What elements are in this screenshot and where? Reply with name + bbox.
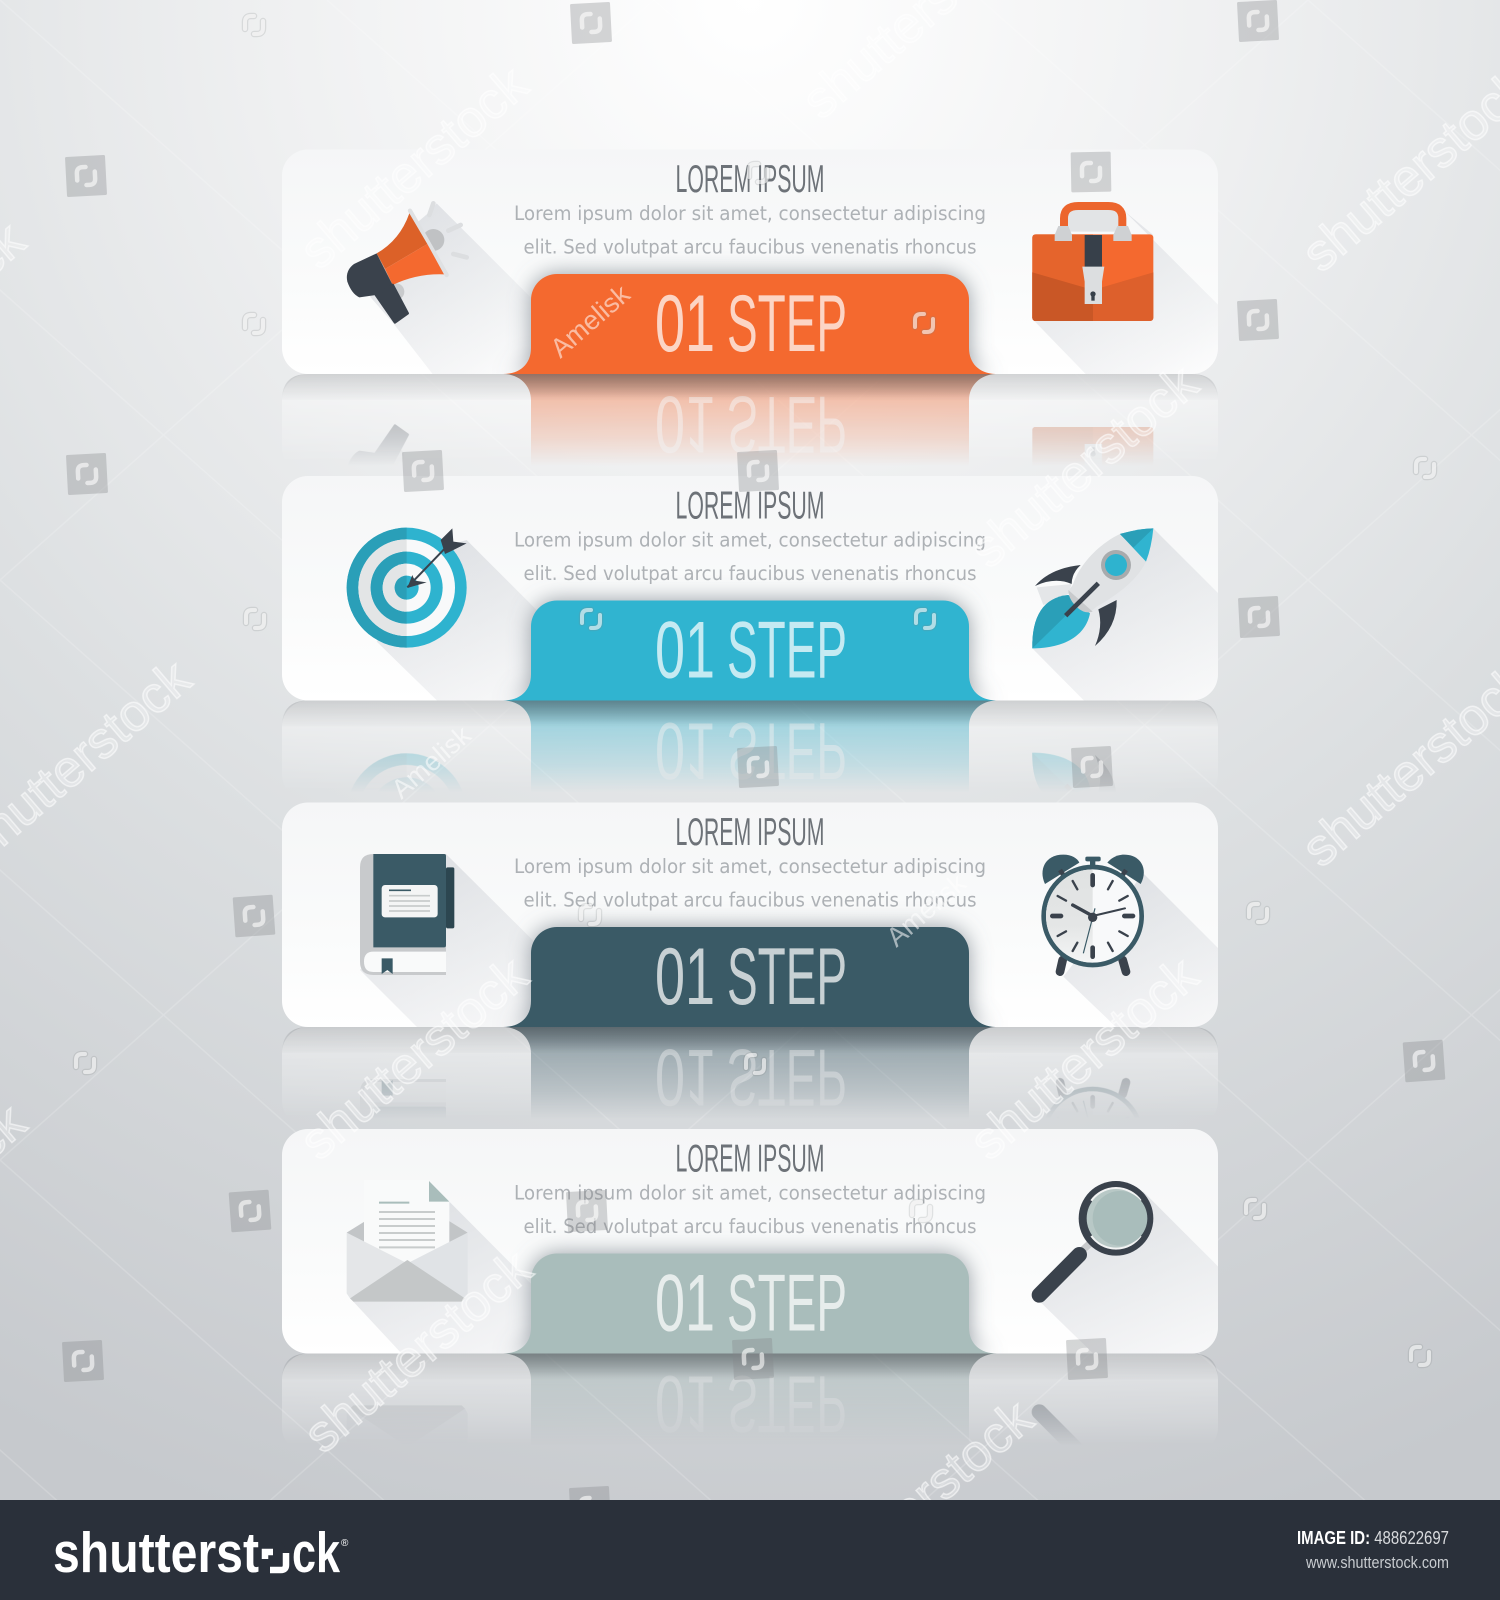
step label row 1: STEP	[727, 279, 847, 369]
seam shadow row 1	[282, 374, 1218, 400]
tab row 1	[503, 274, 997, 374]
watermark: diagonal wordmarks: shutterstock	[958, 945, 1208, 1170]
body text row 2: elit. Sed volutpat arcu faucibus venenatis rhoncus	[524, 562, 976, 585]
step label row 4: STEP	[727, 1258, 847, 1348]
icon: magnifying glass	[1032, 1181, 1218, 1354]
body text row 3	[514, 855, 986, 912]
body text row 3: elit. Sed volutpat arcu faucibus venenatis rhoncus	[524, 888, 976, 912]
watermark: Amelisk credits: Amelisk	[545, 279, 636, 364]
watermark: diagonal wordmarks: shutterstock	[288, 945, 538, 1170]
tab row 4	[503, 1254, 997, 1354]
reflection of row 4: STEP	[727, 1358, 847, 1448]
body text row 4: elit. Sed volutpat arcu faucibus venenatis rhoncus	[524, 1215, 976, 1238]
icon: briefcase	[1032, 202, 1218, 374]
icon: rocket	[1032, 528, 1218, 700]
tab shadow row 4	[503, 1254, 997, 1354]
icon: book	[360, 854, 532, 1027]
reflection of row 1: STEP	[727, 379, 847, 469]
body text row 4: Lorem ipsum dolor sit amet, consectetur adipiscing	[514, 1182, 986, 1204]
watermark: Amelisk credits: Amelisk	[386, 720, 477, 805]
watermark: diagonal wordmarks: shutterstock	[958, 353, 1208, 578]
watermark: diagonal wordmarks: shutterstock	[292, 1238, 542, 1463]
panel: step row 2 (teal)	[282, 476, 1300, 873]
tab shadow row 1	[503, 274, 997, 374]
reflection of row 4: 01	[655, 1358, 715, 1448]
title row 1: LOREM IPSUM	[676, 158, 824, 201]
card panel row 1	[282, 150, 1218, 374]
icon: target with arrow	[346, 528, 536, 700]
registered mark: ®	[341, 1538, 349, 1549]
title row 2: LOREM IPSUM	[676, 484, 824, 528]
reflection of row 4	[282, 1354, 1218, 1438]
watermark: diagonal wordmarks: shutterstock	[288, 54, 538, 279]
body text row 2	[514, 528, 986, 585]
step label row 1: 01	[655, 279, 715, 369]
seam shadow row 3	[282, 1027, 1218, 1053]
card panel row 3	[282, 802, 1218, 1027]
footer logo wordmark: shutterst	[53, 1521, 259, 1585]
panel: step row 4 (sage)	[282, 1129, 1218, 1438]
reflection of row 3: 01	[655, 1032, 715, 1122]
icon: megaphone	[346, 201, 522, 374]
reflection of row 2: 01	[655, 706, 715, 796]
body text row 3: Lorem ipsum dolor sit amet, consectetur adipiscing	[514, 855, 986, 878]
body text row 1: Lorem ipsum dolor sit amet, consectetur adipiscing	[514, 202, 986, 225]
panel: step row 1 (orange)	[282, 150, 1243, 545]
seam shadow row 4	[282, 1354, 1218, 1380]
icon: alarm clock	[1041, 854, 1218, 1027]
body text row 4	[514, 1182, 986, 1238]
footer logo swirl	[265, 1552, 286, 1570]
tab shadow row 3	[503, 927, 997, 1027]
card panel row 2	[282, 476, 1218, 700]
watermark: Amelisk credits: Amelisk	[881, 868, 972, 953]
watermark: Amelisk credits	[386, 279, 972, 953]
body text row 1	[514, 202, 986, 258]
step label row 3: STEP	[727, 932, 847, 1022]
step label row 2: 01	[655, 606, 715, 696]
website: www.shutterstock.com	[1305, 1553, 1449, 1572]
tab shadow row 2	[503, 600, 997, 700]
icon: open envelope with letter	[346, 1181, 528, 1354]
body text row 1: elit. Sed volutpat arcu faucibus venenatis rhoncus	[524, 236, 976, 258]
reflection of row 3	[282, 1027, 1218, 1112]
image id: IMAGE ID: 488622697	[1297, 1528, 1449, 1548]
step label row 2: STEP	[727, 606, 847, 696]
footer bar	[0, 1500, 1500, 1600]
step label row 4: 01	[655, 1258, 715, 1348]
card panel row 4	[282, 1129, 1218, 1354]
reflection of row 3: STEP	[727, 1032, 847, 1122]
tab row 2	[503, 600, 997, 700]
reflection of row 2	[282, 700, 1218, 786]
reflection of row 1: 01	[655, 379, 715, 469]
title row 3: LOREM IPSUM	[676, 811, 824, 854]
watermark: small swirl marks	[76, 16, 1434, 1365]
reflection of row 1	[284, 374, 1216, 460]
panel: step row 3 (dark teal)	[282, 802, 1218, 1112]
footer logo wordmark: o	[266, 1521, 288, 1585]
title row 4: LOREM IPSUM	[676, 1138, 824, 1180]
step label row 3: 01	[655, 932, 715, 1022]
reflection of row 2: STEP	[727, 706, 847, 796]
body text row 2: Lorem ipsum dolor sit amet, consectetur adipiscing	[514, 528, 986, 552]
seam shadow row 2	[282, 700, 1218, 726]
tab row 3	[503, 927, 997, 1027]
footer logo wordmark: ck	[292, 1521, 340, 1585]
